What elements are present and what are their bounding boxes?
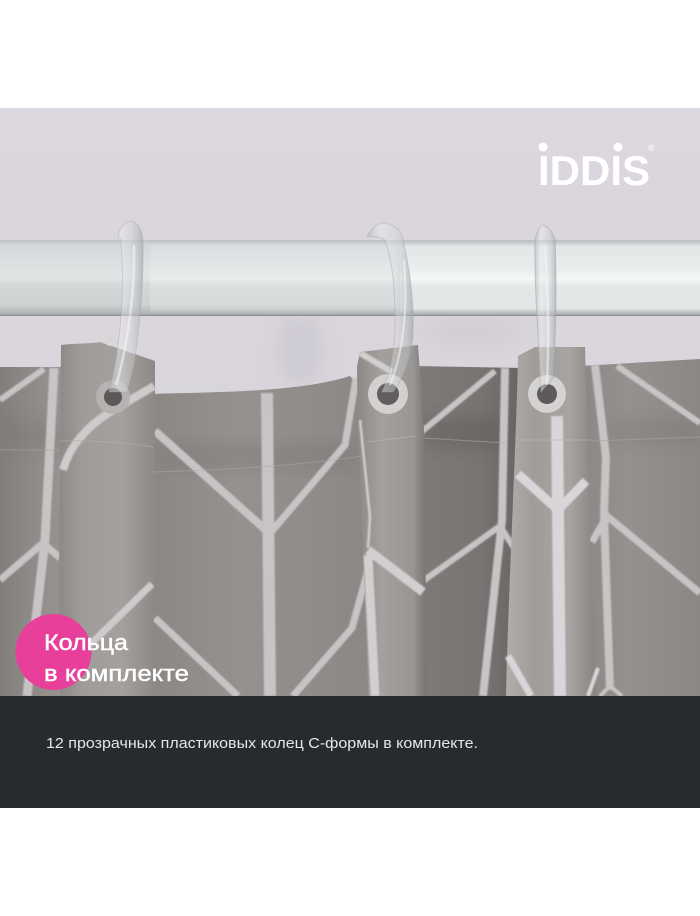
heading: rings included: Кольца: [44, 630, 129, 655]
dark caption band: [0, 696, 700, 808]
heading: rings included: в комплекте: [44, 661, 189, 686]
curtain hooks: [105, 320, 372, 350]
wall backdrop: [0, 108, 700, 408]
fold three with grommet: [506, 347, 598, 696]
ring three: [535, 225, 556, 392]
logo: IDDIS: IDDIS: [538, 147, 650, 194]
curtain panels: [0, 359, 700, 696]
pattern lines on back panels: [0, 365, 700, 696]
caption text: 12 прозрачных пластиковых колец С-формы в комплекте.: [46, 736, 478, 752]
pink accent circle: [16, 614, 92, 690]
grommet two: [368, 374, 408, 414]
grommet three: [528, 375, 566, 413]
grommet one: [96, 380, 130, 414]
hem stitching: [0, 437, 700, 472]
shower rod: [0, 240, 700, 316]
fold one with grommet: [59, 342, 155, 696]
logo: IDDIS: ®: [648, 143, 655, 153]
photo: shower curtain on rod: [0, 108, 700, 696]
ring two: [367, 223, 413, 392]
ring one: [109, 221, 143, 392]
fold two with grommet: [357, 345, 427, 696]
